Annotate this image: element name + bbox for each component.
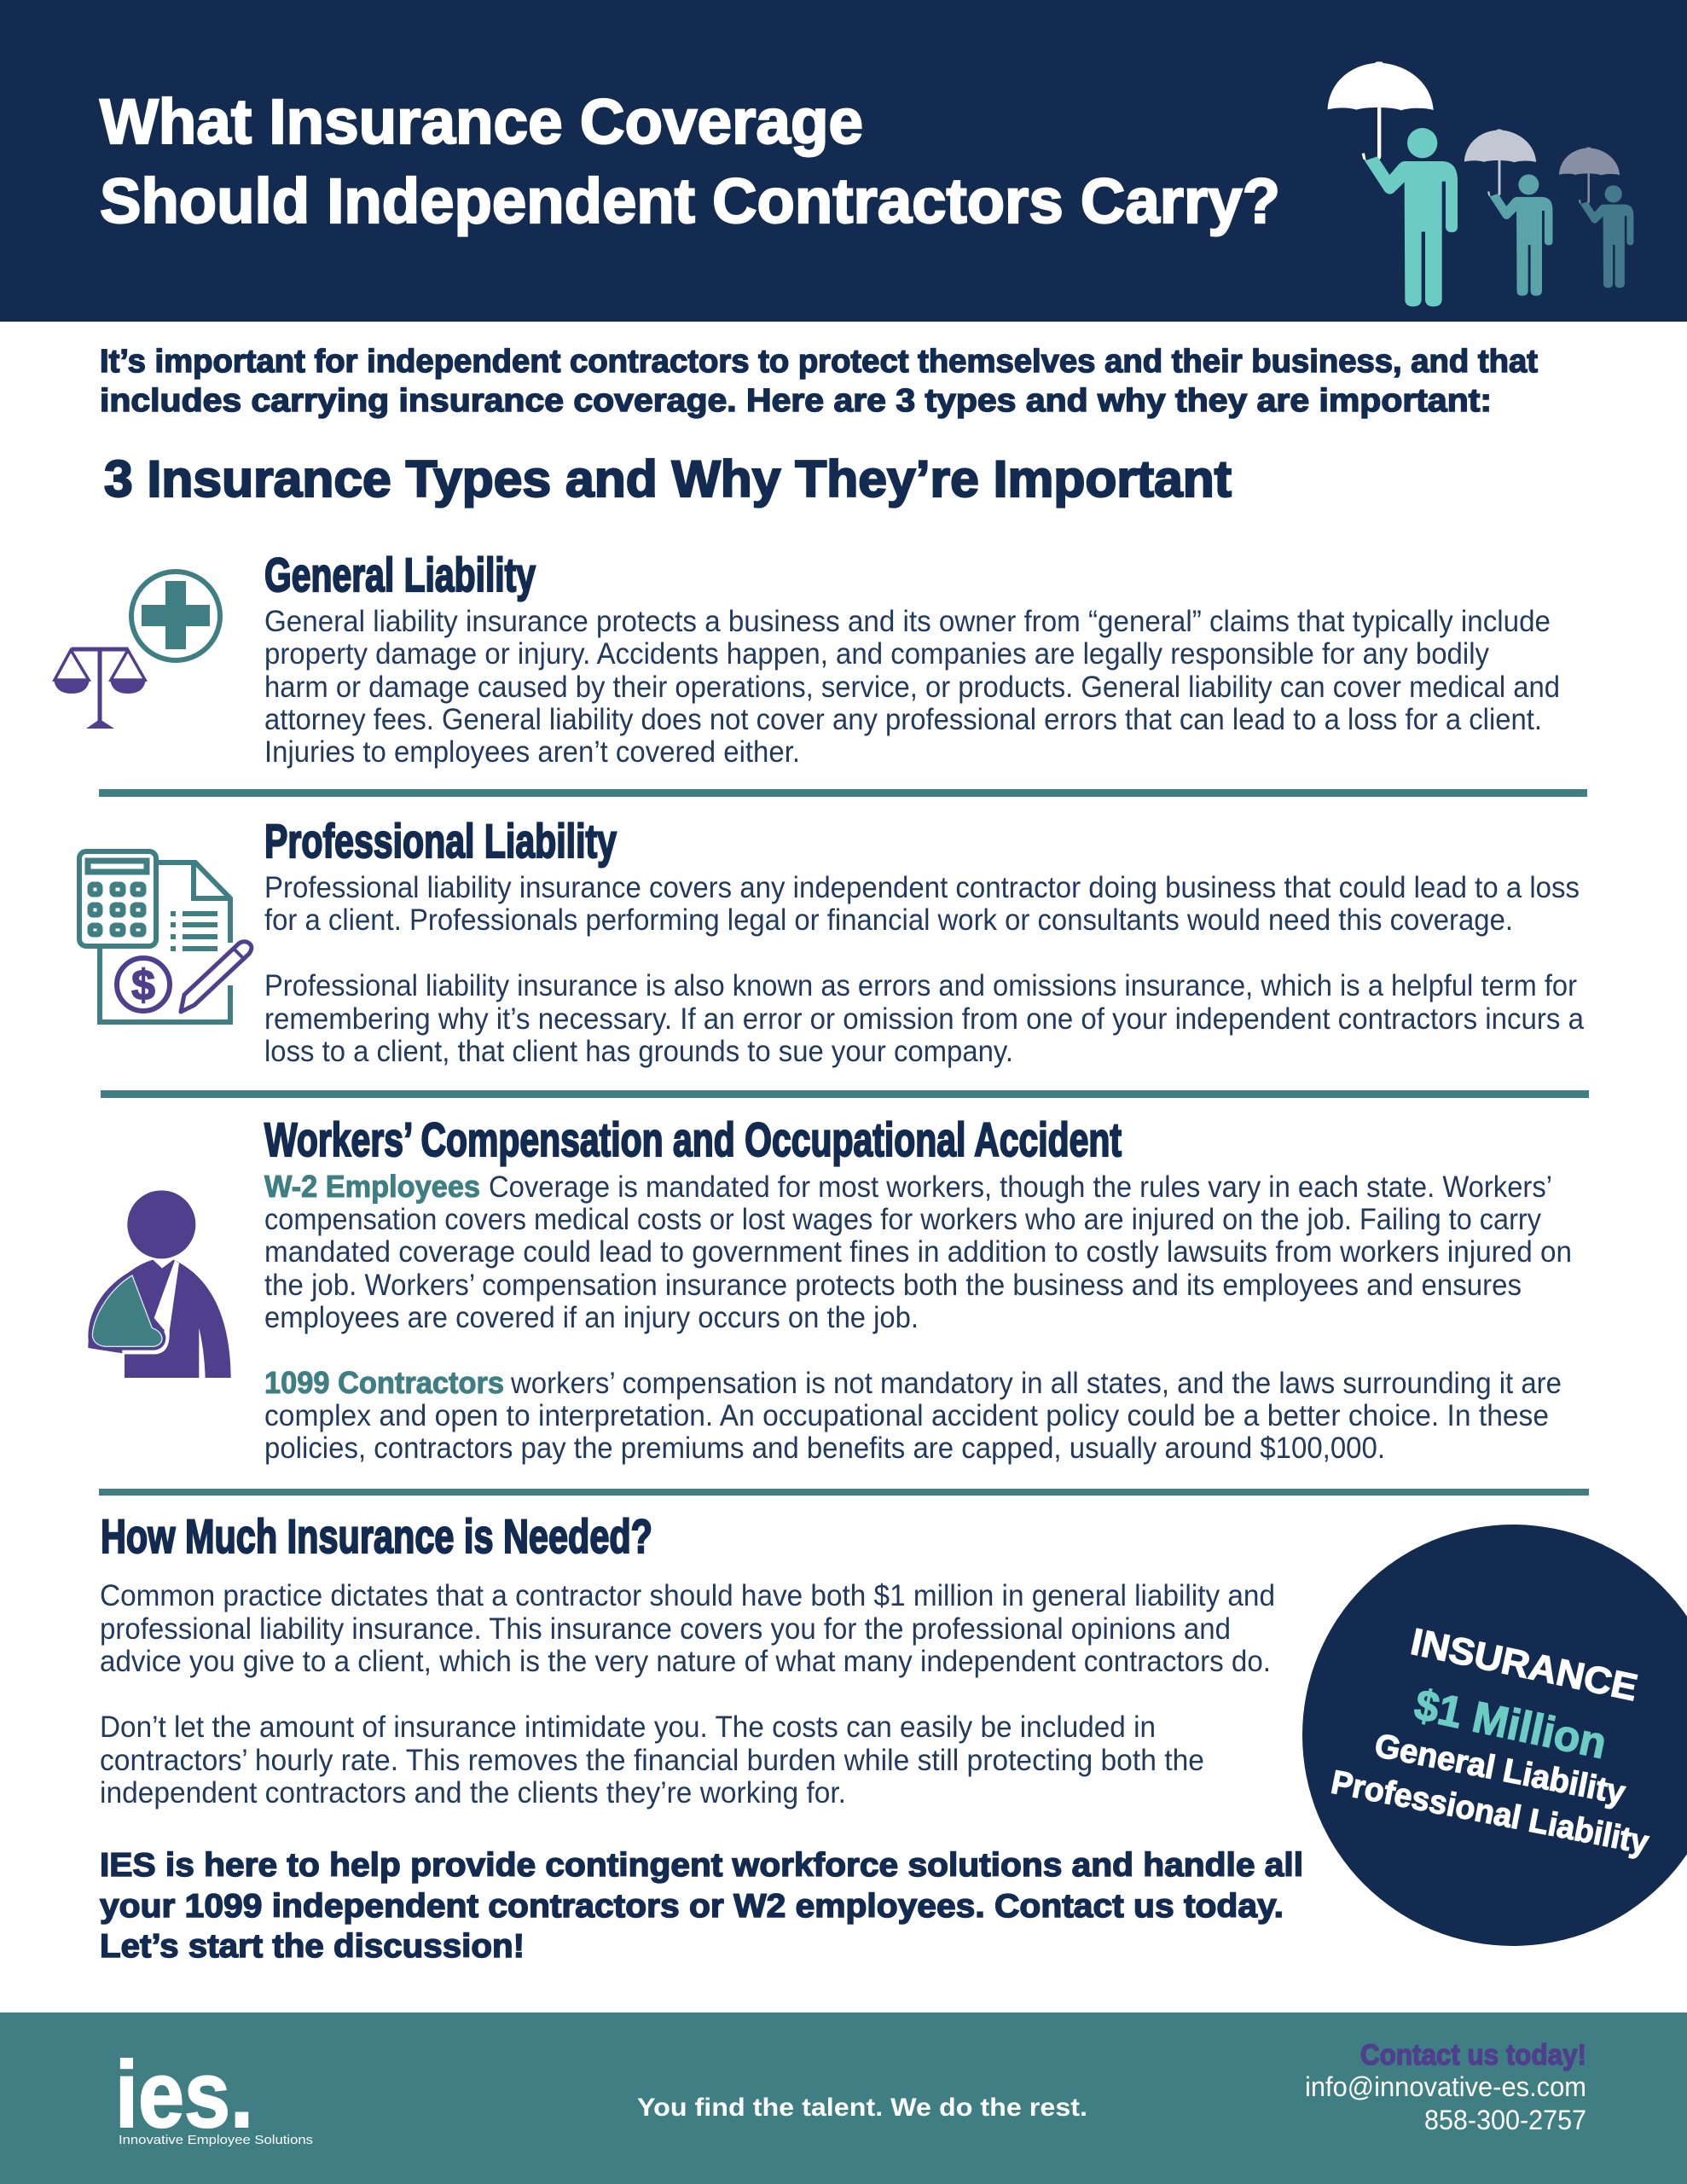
body text: general liability: Injuries to employees aren’t covered either. [264, 735, 800, 769]
intro text: includes carrying insurance coverage. Here are 3 types and why they are important: [100, 383, 1492, 419]
icon: three people holding umbrellas [1328, 61, 1633, 306]
body text: general liability: attorney fees. General liability does not cover any professional errors that can lead to a loss for a client. [264, 703, 1542, 736]
callout: insurance circle badge: $1 Million [1411, 1680, 1611, 1768]
body text: 1099 contractors: policies, contractors pay the premiums and benefits are capped, usually around $100,000. [264, 1432, 1385, 1465]
icon: calculator, document, dollar and pencil [79, 851, 252, 1022]
panel: how much insurance is needed [100, 1509, 1303, 1965]
intro text: It’s important for independent contractors to protect themselves and their business, and that [100, 344, 1538, 380]
body text: hourly rate: independent contractors and the clients they’re working for. [100, 1776, 846, 1809]
section heading: 3 Insurance Types and Why They’re Important [104, 450, 1232, 508]
contact details: info@innovative-es.com [1305, 2071, 1586, 2102]
contact details [1305, 2039, 1586, 2135]
body text: W-2 employees: mandated coverage could lead to government fines in addition to costly lawsuits from workers injured on [264, 1235, 1572, 1269]
body text: W-2 employees: the job. Workers’ compensation insurance protects both the business and its employees and ensures [264, 1269, 1522, 1302]
call to action: Let’s start the discussion! [100, 1928, 525, 1965]
intro text [100, 344, 1538, 419]
heading: workers' compensation: Workers’ Compensation and Occupational Accident [264, 1112, 1122, 1166]
body text: general liability: harm or damage caused by their operations, service, or products. General liability can cover medical and [264, 671, 1560, 704]
heading: general liability: General Liability [264, 548, 536, 601]
tagline: You find the talent. We do the rest. [637, 2094, 1087, 2122]
body text: hourly rate: contractors’ hourly rate. This removes the financial burden while still protecting both the [100, 1744, 1204, 1777]
icon: calculator, document, dollar and pencil: $ [131, 961, 155, 1009]
body text: common practice: professional liability insurance. This insurance covers you for the professional opinions and [100, 1612, 1231, 1646]
footer band [0, 2013, 1687, 2184]
body text: common practice: Common practice dictates that a contractor should have both $1 million in general liability and [100, 1579, 1275, 1612]
heading: professional liability: Professional Liability [264, 814, 617, 868]
header banner [0, 0, 1687, 322]
logo: ies: ies. [115, 2042, 253, 2147]
contact details: Contact us today! [1360, 2039, 1586, 2071]
title: What Insurance Coverage [100, 86, 863, 157]
title [100, 86, 1280, 236]
call to action: your 1099 independent contractors or W2 employees. Contact us today. [100, 1888, 1284, 1925]
body text: 1099 contractors [264, 1365, 1562, 1465]
body text: professional liability: loss to a client, that client has grounds to sue your company. [264, 1035, 1013, 1068]
body text: 1099 contractors: complex and open to interpretation. An occupational accident policy could be a better choice. In these [264, 1399, 1549, 1432]
callout: insurance circle badge: General Liability [1371, 1728, 1628, 1812]
body text: professional liability [264, 871, 1585, 1068]
body text: general liability [264, 605, 1560, 769]
panel: general liability [54, 548, 1560, 769]
callout: insurance circle badge: INSURANCE [1407, 1621, 1641, 1709]
body text: professional liability: Professional liability insurance is also known as errors and omissions insurance, which is a helpful term for [264, 969, 1577, 1002]
body text: professional liability: remembering why it’s necessary. If an error or omission from one of your independent contractors incurs a [264, 1002, 1585, 1036]
panel: workers' compensation [88, 1112, 1572, 1465]
title: Should Independent Contractors Carry? [100, 166, 1280, 236]
body text: W-2 employees [264, 1169, 1572, 1334]
icon: scales and medical cross [54, 572, 220, 729]
body text: common practice: advice you give to a client, which is the very nature of what many independent contractors do. [100, 1645, 1271, 1678]
call to action: IES is here to help provide contingent workforce solutions and handle all [100, 1847, 1303, 1884]
body text: W-2 employees: W-2 Employees [264, 1169, 480, 1204]
body text: 1099 contractors: workers’ compensation is not mandatory in all states, and the laws surrounding it are [510, 1367, 1562, 1400]
body text: W-2 employees: employees are covered if an injury occurs on the job. [264, 1301, 919, 1334]
contact details: 858-300-2757 [1424, 2105, 1586, 2135]
body text: professional liability: Professional liability insurance covers any independent contractor doing business that could lead to a loss [264, 871, 1580, 904]
callout: insurance circle badge [1302, 1525, 1687, 1946]
icon: injured person with arm sling [88, 1190, 231, 1378]
body text: W-2 employees: compensation covers medical costs or lost wages for workers who are injured on the job. Failing to carry [264, 1203, 1541, 1236]
body text: W-2 employees: Coverage is mandated for most workers, though the rules vary in each state. Workers’ [489, 1170, 1552, 1204]
body text: common practice [100, 1579, 1275, 1678]
call to action [100, 1847, 1303, 1965]
body text: 1099 contractors: 1099 Contractors [264, 1365, 504, 1400]
body text: hourly rate [100, 1711, 1204, 1809]
body text: general liability: property damage or injury. Accidents happen, and companies are legally responsible for any bodily [264, 637, 1489, 671]
panel: professional liability [79, 814, 1585, 1068]
body text: hourly rate: Don’t let the amount of insurance intimidate you. The costs can easily be included in [100, 1711, 1156, 1744]
heading: how much insurance: How Much Insurance is Needed? [101, 1509, 652, 1563]
body text: general liability: General liability insurance protects a business and its owner from “general” claims that typically include [264, 605, 1551, 638]
logo: ies: Innovative Employee Solutions [119, 2134, 313, 2147]
body text: professional liability: for a client. Professionals performing legal or financial work or consultants would need this coverage. [264, 903, 1513, 937]
callout: insurance circle badge: Professional Liability [1328, 1764, 1652, 1862]
